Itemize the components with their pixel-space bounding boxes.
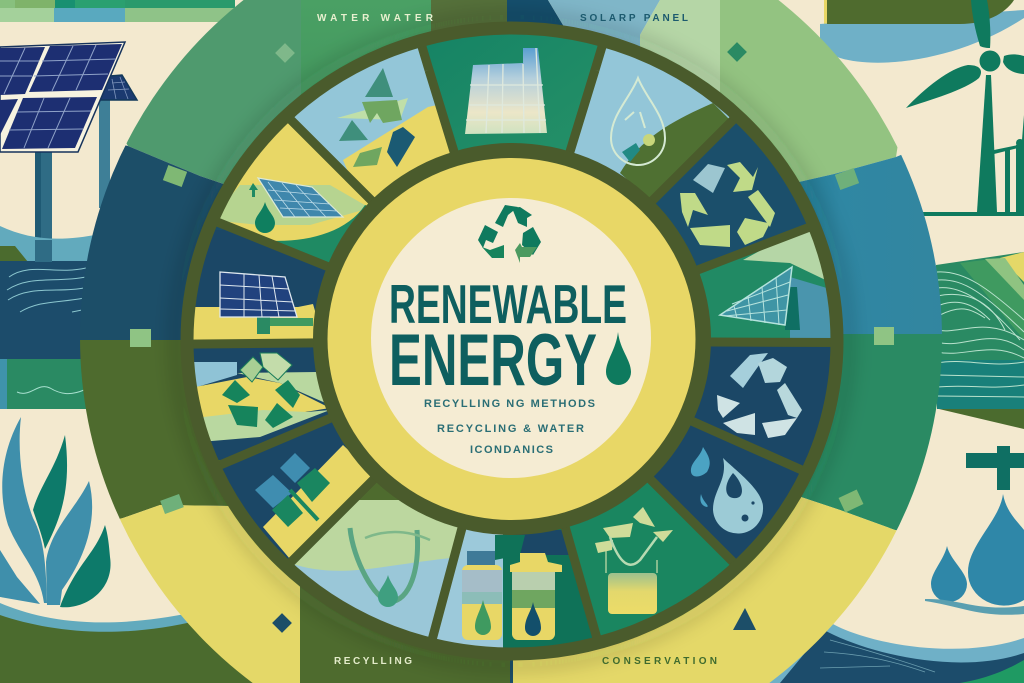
- label: water water: WATER WATER: [317, 13, 434, 24]
- subtitle line one: RECYLLING NG METHODS: [424, 398, 595, 410]
- icon: solar panel grid: [0, 42, 125, 152]
- dark inner rim: [313, 143, 711, 535]
- marker: tab left upper: [163, 165, 187, 187]
- tile: seaweed: [294, 500, 458, 637]
- panel: top right strip: [820, 0, 1024, 63]
- swoosh: [925, 599, 1024, 615]
- tile: navy and yellow plus: [222, 422, 370, 559]
- dark outer rim: [187, 28, 837, 654]
- icon: small drop: [931, 546, 967, 602]
- panel: plant lower left: [0, 417, 290, 683]
- tile dividers: [194, 46, 830, 639]
- tile: blue and yellow leaves: [294, 48, 450, 198]
- icon: centre recycling symbol: [478, 205, 541, 263]
- subtitle line two: RECYCLING & WATER: [437, 423, 584, 435]
- icon: wind turbines: [906, 0, 1024, 216]
- tile: teal solar panel: [700, 232, 830, 338]
- marker: tab left middle: [130, 329, 151, 347]
- panel: top left colour strip: [0, 0, 235, 22]
- marker: diamond top right: [727, 42, 747, 62]
- subtitle line three: ICONDANICS: [470, 444, 553, 456]
- marker: navy triangle bottom right: [733, 608, 756, 630]
- centre yellow disc: [328, 158, 696, 520]
- title: energy: ENERGY: [389, 320, 597, 401]
- icon: main post: [35, 148, 52, 260]
- marker: tab right middle: [874, 327, 894, 345]
- marker: tab left lower: [160, 494, 184, 514]
- marker: tab right upper: [835, 168, 859, 190]
- panel: right wave field: [936, 252, 1024, 429]
- label: recycling: RECYLLING: [334, 656, 412, 667]
- label: solar panel: SOLARP PANEL: [580, 13, 688, 24]
- ground curve: [0, 597, 200, 683]
- icon: small rear panel: [100, 75, 137, 100]
- tile: striped recycle: [194, 347, 328, 460]
- panel: left water landscape: [0, 226, 100, 409]
- label: conservation: CONSERVATION: [602, 656, 717, 667]
- icon: rear post: [99, 98, 110, 208]
- panel: solar array top left: [0, 42, 137, 260]
- title: renewable: RENEWABLE: [389, 273, 627, 335]
- tile: yellow panel and drop: [220, 123, 368, 262]
- tile: navy recycle pale: [694, 346, 830, 466]
- panel: fourteen icon tiles: [180, 0, 860, 670]
- marker: tab right lower: [839, 490, 863, 512]
- panel: lower right landscape: [760, 623, 1024, 683]
- icon: cross: [966, 446, 1024, 490]
- tile: navy water drops: [654, 426, 799, 559]
- right bottle: [510, 553, 562, 572]
- icon: cross and water drops lower right: [925, 446, 1024, 615]
- tile: navy solar panel: [194, 271, 315, 340]
- icon: plant leaves: [0, 417, 111, 607]
- marker: navy diamond bottom left: [272, 613, 292, 633]
- icon: large drop: [968, 494, 1024, 606]
- left bottle: [467, 551, 495, 565]
- marker: diamond top left: [275, 43, 295, 63]
- tile: window solar: [426, 34, 598, 150]
- tile: navy recycle lime: [656, 123, 806, 266]
- tile: bottles with drops: [437, 528, 592, 648]
- icon: title water drop: [606, 332, 631, 385]
- tile: green jar with plant: [570, 482, 730, 636]
- tile: water drop outline: [574, 48, 730, 198]
- centre cream disc: [371, 198, 651, 478]
